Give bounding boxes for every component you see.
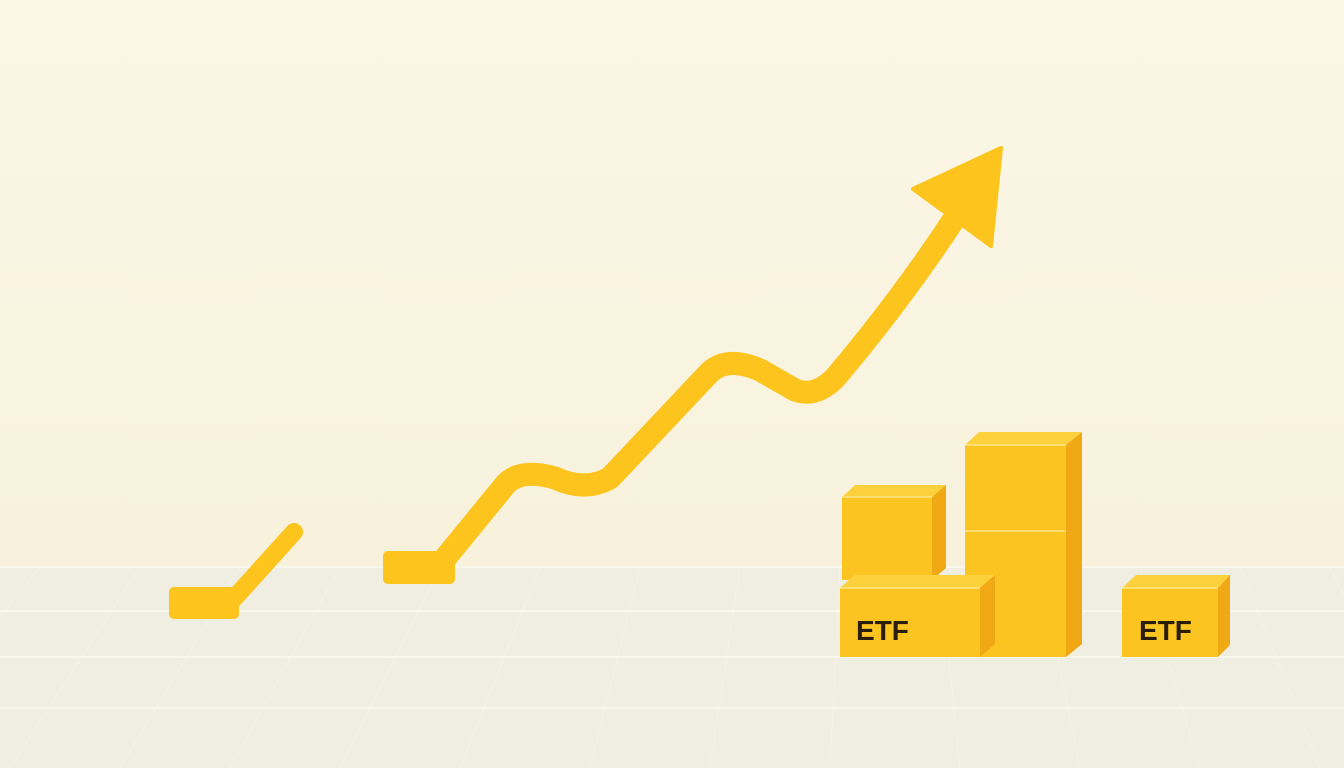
ETF box left: ETF <box>856 615 909 646</box>
ETF box left <box>840 575 995 657</box>
ETF box right <box>1122 575 1230 657</box>
line segment 2 with arrow <box>383 148 1001 584</box>
tall box <box>965 432 1082 657</box>
ETF box right: ETF <box>1139 615 1192 646</box>
ETF box stack <box>840 432 1082 657</box>
line segment 1 <box>169 532 294 619</box>
arrowhead <box>913 148 1001 246</box>
small upper cube <box>842 485 946 580</box>
